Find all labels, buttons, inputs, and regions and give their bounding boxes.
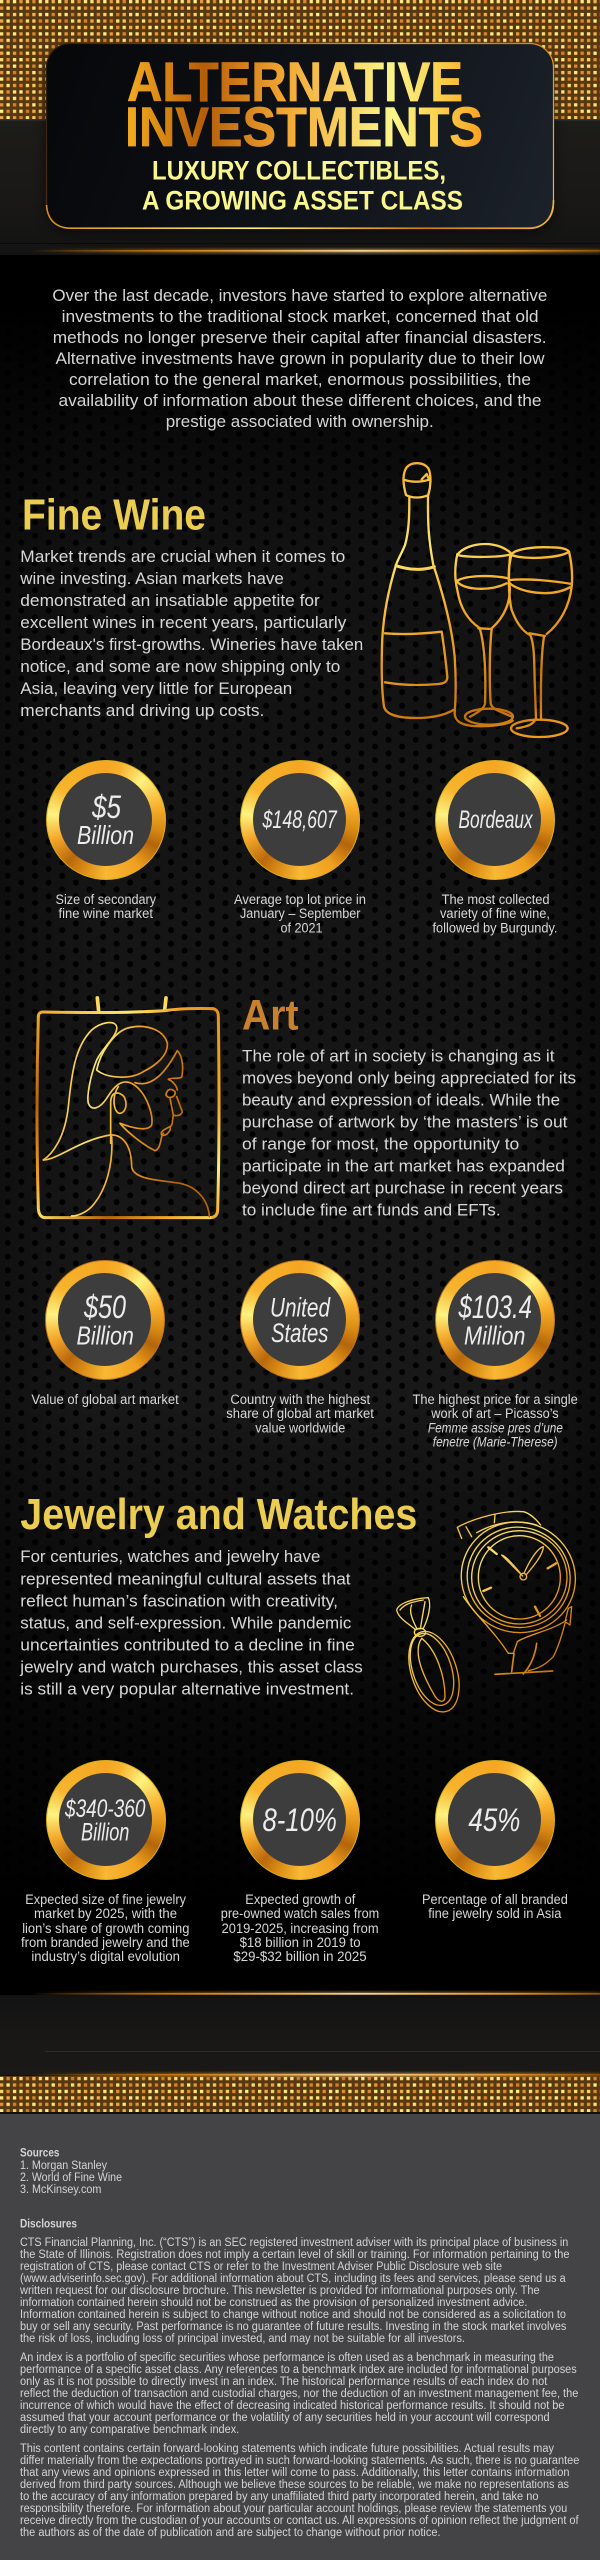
caption: Expected growth of <box>245 1892 356 1907</box>
icon: framed line-art portrait <box>37 998 219 1218</box>
stat: united states <box>226 1260 374 1436</box>
value: 45% <box>468 1802 520 1838</box>
caption: Average top lot price in <box>234 892 366 907</box>
disclosure paragraph one: (www.adviserinfo.sec.gov). For additional information about CTS, including its fees and services, please send us a <box>20 2273 566 2285</box>
caption: of 2021 <box>280 921 322 936</box>
value: United <box>270 1293 331 1323</box>
caption <box>21 1892 190 1964</box>
panel: art <box>31 991 578 1450</box>
value: $148,607 <box>262 806 338 834</box>
caption: from branded jewelry and the <box>21 1935 190 1950</box>
value <box>458 1289 532 1350</box>
disclosure paragraph three: the authors as of the date of publication and are subject to change without prior notice. <box>20 2527 440 2539</box>
caption: followed by Burgundy. <box>432 921 558 936</box>
disclosure paragraph one <box>19 2237 569 2345</box>
caption: The highest price for a single <box>412 1392 578 1407</box>
disclosure paragraph two: performance of a specific asset class. Any references to a benchmark index are included for informational purposes <box>20 2364 577 2376</box>
value <box>76 1289 134 1350</box>
ring <box>240 1260 360 1380</box>
ring <box>45 1260 165 1380</box>
disclosure paragraph one: the risk of loss, including loss of principal invested, and may not be suitable for all investors. <box>20 2333 465 2345</box>
art text: beauty and expression of ideals. While the <box>242 1091 560 1110</box>
caption: pre-owned watch sales from <box>221 1906 379 1921</box>
value: $103.4 <box>458 1289 532 1325</box>
intro paragraph: investments to the traditional stock market, concerned that old <box>62 307 539 326</box>
stat: 103.4 million <box>412 1260 578 1450</box>
jewelry text: jewelry and watch purchases, this asset class <box>19 1657 363 1676</box>
fine wine text: demonstrated an insatiable appetite for <box>20 591 320 610</box>
intro paragraph: prestige associated with ownership. <box>166 412 434 431</box>
caption: fine wine market <box>58 906 153 921</box>
stat: top lot price <box>234 760 366 936</box>
stat: watch sales growth <box>221 1760 379 1964</box>
subtitle: LUXURY COLLECTIBLES, <box>152 155 446 185</box>
subtitle <box>142 155 463 215</box>
caption <box>412 1392 578 1450</box>
value: Million <box>464 1320 526 1350</box>
intro paragraph: methods no longer preserve their capital after financial disasters. <box>53 328 547 347</box>
caption: Percentage of all branded <box>422 1892 568 1907</box>
value: States <box>271 1318 328 1348</box>
art text: beyond direct art purchase in recent years <box>242 1179 563 1198</box>
disclosure paragraph three: to the accuracy of any information prepared by any unaffiliated third party incorporated herein, and take no <box>20 2491 538 2503</box>
panel: jewelry and watches <box>19 1491 591 1964</box>
disclosure paragraph one: information contained herein should not be construed as the provision of personalized investment advice. <box>20 2297 527 2309</box>
intro paragraph <box>52 286 547 431</box>
fine wine text <box>19 547 363 720</box>
disclosure paragraph two: An index is a portfolio of specific securities whose performance is often used as a benchmark in measuring the <box>20 2352 554 2364</box>
ring <box>240 1760 360 1880</box>
value: Bordeaux <box>458 806 534 834</box>
caption: Value of global art market <box>31 1392 179 1407</box>
art text: moves beyond only being appreciated for its <box>242 1069 576 1088</box>
disclosure paragraph two: incurrence of which would have the effect of decreasing indicated historical performance results. It should not be <box>20 2400 564 2412</box>
fine wine text: Market trends are crucial when it comes to <box>20 547 345 566</box>
caption: 2019-2025, increasing from <box>222 1921 379 1936</box>
panel: fine wine <box>19 463 572 936</box>
caption: lion’s share of growth coming <box>22 1921 189 1936</box>
header band <box>0 0 600 255</box>
fine wine text: notice, and some are now shipping only to <box>20 657 340 676</box>
caption <box>56 892 156 921</box>
value <box>77 789 134 850</box>
value: Billion <box>76 1320 134 1350</box>
caption: $18 billion in 2019 to <box>240 1935 361 1950</box>
caption: industry’s digital evolution <box>31 1949 180 1964</box>
caption <box>226 1392 374 1436</box>
sources: 2. World of Fine Wine <box>20 2172 122 2184</box>
dotted section background <box>0 255 600 1995</box>
disclosure paragraph one: buy or sell any security. Past performance is no guarantee of future results. Investing in the stock market involves <box>20 2321 567 2333</box>
sources: 1. Morgan Stanley <box>20 2160 107 2172</box>
disclosure paragraph three: responsibility therefore. For information about your particular account holdings, please review the statements you <box>20 2503 567 2515</box>
stat: 50 billion <box>31 1260 179 1407</box>
caption: fine jewelry sold in Asia <box>428 1906 562 1921</box>
disclosure paragraph two: assumed that your account performance or the volatility of any securities held in your account will correspond <box>20 2412 550 2424</box>
stat: jewelry market size <box>21 1760 190 1964</box>
heading: jewelry and watches: Jewelry and Watches <box>20 1491 417 1539</box>
caption: $29-$32 billion in 2025 <box>233 1949 367 1964</box>
disclosure paragraph two: directly to any comparative benchmark index. <box>20 2424 239 2436</box>
disclosure paragraph two: only as it is not possible to directly invest in an index. The historical performance results of each index do not <box>20 2376 548 2388</box>
caption: value worldwide <box>255 1421 345 1436</box>
caption: market by 2025, with the <box>34 1906 177 1921</box>
disclosure paragraph one: registration of CTS, please contact CTS or refer to the Investment Adviser Public Disclosure web site <box>20 2261 502 2273</box>
jewelry text: For centuries, watches and jewelry have <box>20 1547 320 1566</box>
caption: Country with the highest <box>230 1392 370 1407</box>
jewelry text <box>19 1547 363 1698</box>
ring <box>435 1760 555 1880</box>
disclosure paragraph one: written request for our disclosure brochure. This newsletter is provided for informational purposes only. The <box>19 2285 540 2297</box>
art text: of range for most, the opportunity to <box>242 1135 519 1154</box>
ring <box>435 1260 555 1380</box>
intro paragraph: Over the last decade, investors have started to explore alternative <box>52 286 547 305</box>
ring <box>46 760 166 880</box>
disclosure paragraph three <box>20 2443 579 2539</box>
caption <box>432 892 558 936</box>
title: INVESTMENTS <box>125 95 483 158</box>
disclosure paragraph three: This content contains certain forward-looking statements which indicate future possibilities. Actual results may <box>20 2443 554 2455</box>
value: $340-360 <box>64 1795 145 1823</box>
title: ALTERNATIVE <box>127 50 463 113</box>
disclosure paragraph three: that any views and opinions expressed in this letter will come to pass. Additionally, this letter contains information <box>20 2467 570 2479</box>
fine wine text: excellent wines in recent years, particularly <box>20 613 347 632</box>
heading: art: Art <box>242 991 298 1039</box>
caption: fenetre (Marie-Therese) <box>433 1435 558 1450</box>
caption <box>422 1892 568 1921</box>
fine wine text: Asia, leaving very little for European <box>20 679 292 698</box>
sources: 3. McKinsey.com <box>20 2184 101 2196</box>
ring <box>46 1760 166 1880</box>
caption: The most collected <box>442 892 550 907</box>
caption: Femme assise pres d’une <box>428 1421 563 1436</box>
intro paragraph: correlation to the general market, enormous possibilities, the <box>69 370 531 389</box>
heading: fine wine: Fine Wine <box>22 490 206 539</box>
disclosure paragraph one: CTS Financial Planning, Inc. (“CTS”) is an SEC registered investment adviser with its principal place of business in <box>20 2237 568 2249</box>
panel: sources and disclosures <box>0 2114 600 2560</box>
stat: 5 billion <box>46 760 166 921</box>
caption: work of art – Picasso’s <box>430 1406 559 1421</box>
stat: bordeaux <box>432 760 558 936</box>
ring <box>435 760 555 880</box>
fine wine text: wine investing. Asian markets have <box>19 569 284 588</box>
value: Billion <box>77 820 134 850</box>
title panel <box>46 44 554 232</box>
disclosure paragraph three: differ materially from the expectations portrayed in such forward-looking statements. As such, there is no guarantee <box>20 2455 579 2467</box>
jewelry text: is still a very popular alternative investment. <box>20 1680 354 1698</box>
jewelry text: reflect human’s fascination with creativity, <box>20 1591 338 1610</box>
caption: Expected size of fine jewelry <box>25 1892 186 1907</box>
disclosure paragraph one: Information contained herein is subject to change without notice and should not be considered as a solicitation to <box>20 2309 566 2321</box>
art text: participate in the art market has expanded <box>242 1157 565 1176</box>
disclosure paragraph one: the State of Illinois. Registration does not imply a certain level of skill or training. For information pertaining to the <box>20 2249 570 2261</box>
value <box>64 1795 145 1846</box>
value <box>270 1293 331 1348</box>
title <box>125 50 483 158</box>
art text <box>242 1047 576 1220</box>
caption <box>234 892 366 936</box>
icon: wine bottle and glasses <box>382 463 572 737</box>
art text: The role of art in society is changing as it <box>242 1047 555 1066</box>
art text: to include fine art funds and EFTs. <box>242 1201 501 1220</box>
value: Billion <box>81 1818 129 1846</box>
disclosures heading: Disclosures <box>20 2219 77 2231</box>
ring <box>240 760 360 880</box>
disclosure paragraph three: receive directly from the custodian of your accounts or contact us. All expressions of opinion reflect the judgment of <box>20 2515 579 2527</box>
caption: January – September <box>240 906 361 921</box>
jewelry text: status, and self-expression. While pandemic <box>20 1613 352 1632</box>
caption: Size of secondary <box>56 892 156 907</box>
sources <box>20 2148 122 2196</box>
fine wine text: Bordeaux's first-growths. Wineries have taken <box>20 635 363 654</box>
caption: share of global art market <box>226 1406 374 1421</box>
value: $5 <box>91 789 121 825</box>
caption: variety of fine wine, <box>440 906 550 921</box>
icon: watch and ring <box>397 1506 591 1718</box>
stat: share sold in asia <box>422 1760 568 1921</box>
caption <box>221 1892 379 1964</box>
intro paragraph: Alternative investments have grown in popularity due to their low <box>56 349 545 368</box>
disclosure paragraph two <box>20 2352 578 2436</box>
sources: Sources <box>20 2148 60 2160</box>
value: 8-10% <box>262 1802 337 1838</box>
fine wine text: merchants and driving up costs. <box>20 701 264 720</box>
disclosure paragraph three: derived from third party sources. Although we believe these sources to be reliable, we make no representations as <box>20 2479 569 2491</box>
subtitle: A GROWING ASSET CLASS <box>142 185 463 215</box>
jewelry text: represented meaningful cultural assets that <box>20 1569 351 1588</box>
footer band <box>0 1992 600 2114</box>
value: $50 <box>83 1289 126 1325</box>
disclosure paragraph two: reflect the deduction of transaction and custodial charges, nor the deduction of an investment management fee, the <box>20 2388 578 2400</box>
intro paragraph: availability of information about these different choices, and the <box>58 391 542 410</box>
jewelry text: uncertainties contributed to a decline in fine <box>20 1635 355 1654</box>
art text: purchase of artwork by ‘the masters’ is out <box>242 1113 568 1132</box>
